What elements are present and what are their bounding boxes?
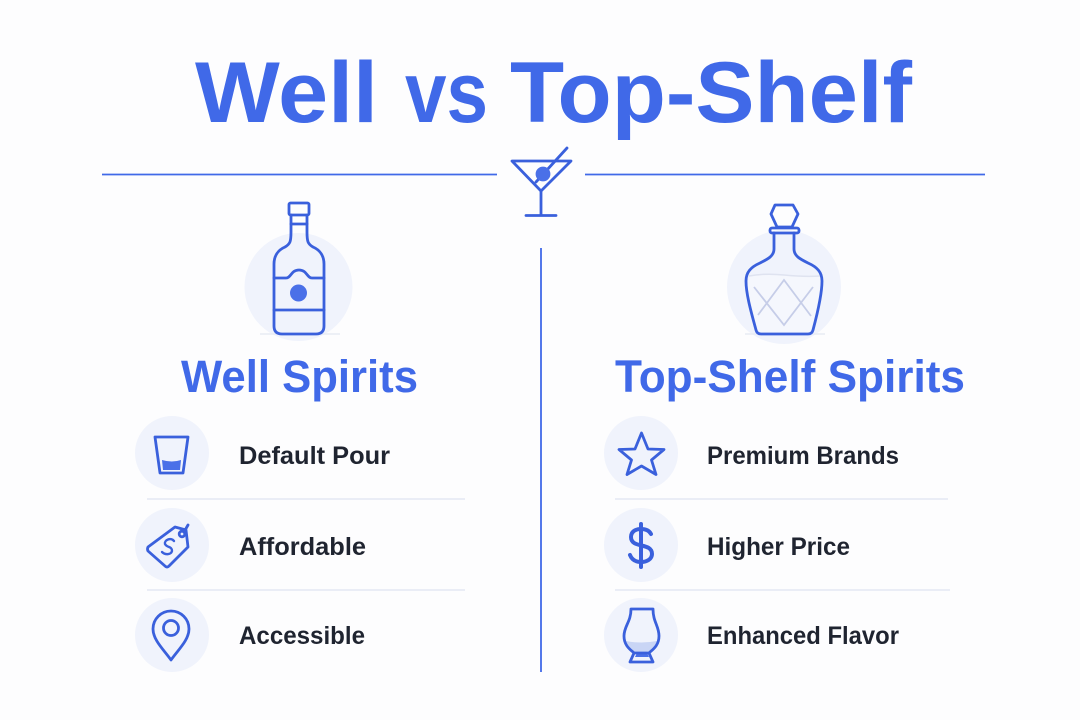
panel: top-shelf spirits bbox=[604, 205, 965, 672]
center divider bbox=[540, 248, 542, 672]
row: default pour bbox=[135, 416, 390, 490]
row: accessible: Accessible bbox=[239, 622, 365, 650]
row: enhanced flavor: Enhanced Flavor bbox=[707, 622, 899, 650]
title: Well bbox=[195, 45, 378, 141]
icon: bottle bbox=[244, 203, 352, 341]
row: accessible bbox=[135, 598, 365, 672]
heading: well spirits: Well Spirits bbox=[181, 351, 418, 402]
heading: top-shelf spirits: Top-Shelf Spirits bbox=[615, 351, 965, 402]
row: higher price: Higher Price bbox=[707, 533, 850, 561]
panel: well spirits bbox=[135, 203, 465, 672]
icon: dollar bbox=[630, 524, 652, 567]
icon: star bbox=[619, 433, 664, 474]
icon: tasting glass bbox=[624, 609, 659, 662]
row: higher price bbox=[604, 508, 850, 582]
row: premium brands: Premium Brands bbox=[707, 442, 899, 470]
title: Top-Shelf bbox=[510, 45, 912, 141]
row: enhanced flavor bbox=[604, 598, 899, 672]
title: vs bbox=[405, 45, 488, 141]
icon: martini glass bbox=[512, 148, 571, 216]
row: premium brands bbox=[604, 416, 899, 490]
icon: decanter bbox=[727, 205, 841, 344]
row: default pour: Default Pour bbox=[239, 442, 390, 470]
row: affordable: Affordable bbox=[239, 533, 366, 561]
row: affordable bbox=[135, 508, 366, 582]
